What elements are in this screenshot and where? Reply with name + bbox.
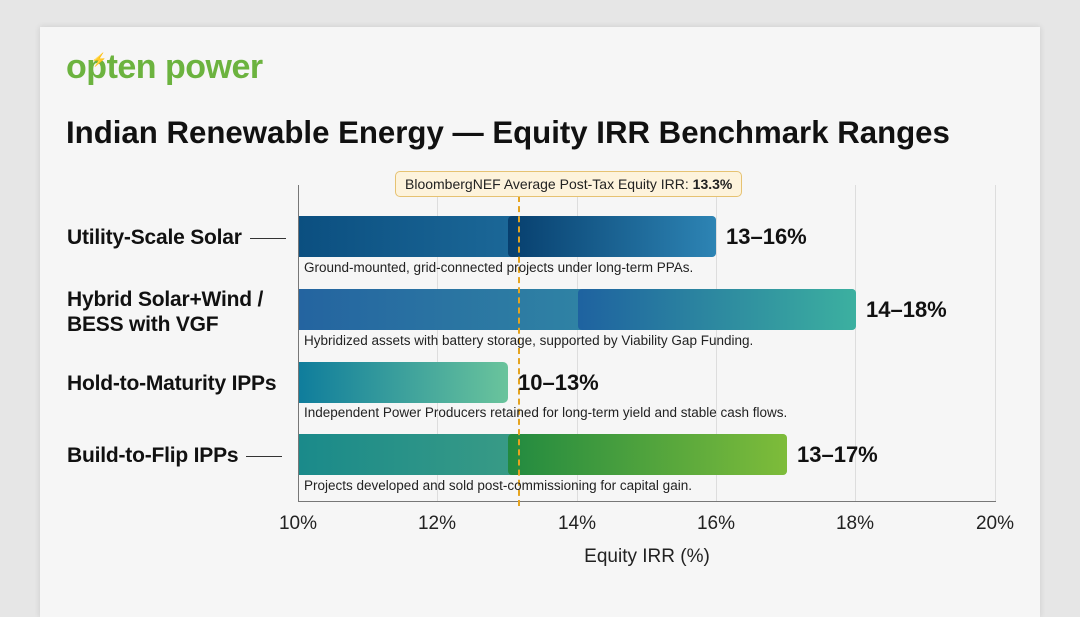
logo: opten power: [66, 48, 263, 86]
values: 13–16%: [726, 224, 807, 249]
chart: 14–18%: [866, 297, 947, 322]
bar: hold-to-maturity: [299, 362, 508, 403]
axis ticks: 10%: [279, 513, 317, 534]
text: BESS with VGF: [67, 313, 218, 336]
bar: utility-scale solar: [299, 216, 716, 257]
chart: 13–17%: [797, 442, 878, 467]
chart: 20%: [976, 513, 1014, 534]
callout: BloombergNEF Average Post-Tax Equity IRR: 13.3%: [405, 176, 732, 192]
axis title: Equity IRR (%): [584, 546, 710, 567]
chart: Hybridized assets with battery storage, supported by Viability Gap Funding.: [304, 333, 753, 348]
descriptions: Ground-mounted, grid-connected projects under long-term PPAs.: [304, 260, 693, 275]
callout: [395, 171, 742, 197]
bar: build-to-flip: [299, 434, 787, 475]
chart: 16%: [697, 513, 735, 534]
category labels: Utility-Scale Solar: [67, 226, 242, 249]
text: Hybrid Solar+Wind /: [67, 288, 263, 311]
chart: 10–13%: [518, 370, 599, 395]
bar: hybrid: [299, 289, 856, 330]
chart: 18%: [836, 513, 874, 534]
chart: Independent Power Producers retained for long-term yield and stable cash flows.: [304, 405, 787, 420]
chart: Projects developed and sold post-commissioning for capital gain.: [304, 478, 692, 493]
average line: [518, 196, 520, 506]
text: Build-to-Flip IPPs: [67, 444, 238, 467]
chart: 14%: [558, 513, 596, 534]
logo: ⚡: [91, 52, 107, 67]
title: Indian Renewable Energy — Equity IRR Benchmark Ranges: [66, 115, 950, 150]
text: Hold-to-Maturity IPPs: [67, 372, 276, 395]
chart: 12%: [418, 513, 456, 534]
